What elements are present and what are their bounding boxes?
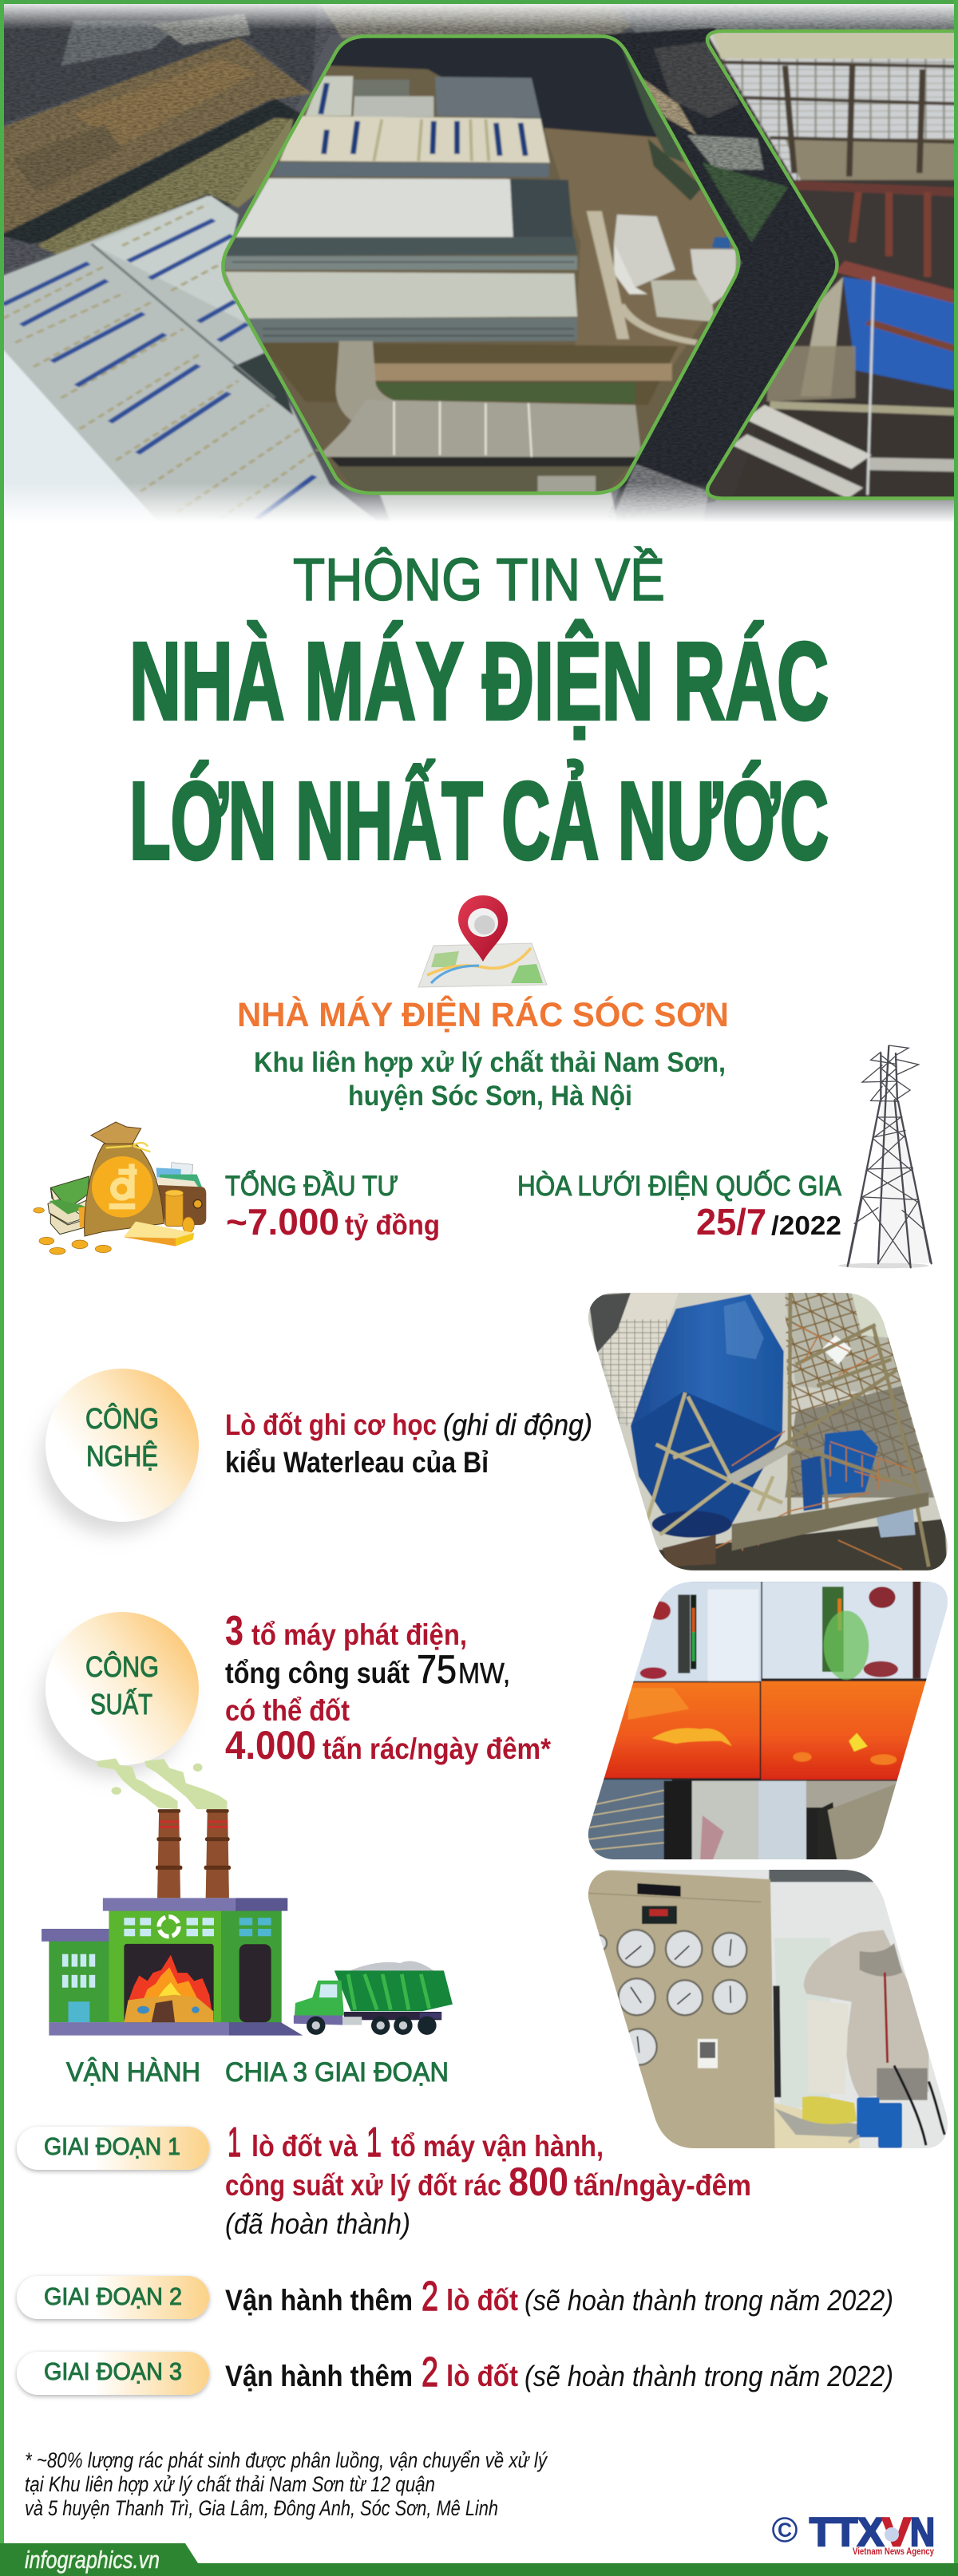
aerial photo background <box>0 0 958 543</box>
footnote: và 5 huyện Thanh Trì, Gia Lâm, Đông Anh, Sóc Sơn, Mê Linh <box>25 2496 498 2520</box>
technology description: kiểu Waterleau của Bỉ <box>225 1446 489 1479</box>
logo: TTXVN: C <box>778 2519 792 2542</box>
grid connection date <box>517 1170 842 1243</box>
pill: giai đoạn 1 <box>17 2127 209 2170</box>
stage 3 description <box>225 2349 893 2396</box>
footer bar: infographics.vn <box>25 2546 160 2574</box>
plant name and address: NHÀ MÁY ĐIỆN RÁC SÓC SƠN <box>237 995 729 1034</box>
technology description: Lò đốt ghi cơ học <box>225 1409 437 1441</box>
badge: công nghệ <box>41 1369 199 1534</box>
footnote: * ~80% lượng rác phát sinh được phân luồng, vận chuyển về xử lý <box>25 2448 548 2472</box>
pill: giai đoạn 3 <box>17 2352 209 2395</box>
stage 1 description: 1 <box>228 2120 241 2166</box>
capacity description: 75 <box>417 1647 457 1692</box>
header photo collage <box>0 0 958 543</box>
panel: capacity <box>41 1608 552 1776</box>
operation heading: VẬN HÀNH <box>66 2057 200 2088</box>
badge: công nghệ: CÔNG <box>85 1402 159 1435</box>
title: THÔNG TIN VỀ <box>293 546 665 613</box>
photo: monitor screens <box>583 1576 958 1869</box>
garbage truck <box>294 1961 453 2035</box>
right hexagon photo <box>696 28 958 502</box>
stage 1 description: 800 <box>509 2159 568 2204</box>
stage 3 description: Vận hành thêm <box>225 2360 413 2392</box>
grid connection date: 25/7 <box>696 1201 766 1243</box>
plant name and address: huyện Sóc Sơn, Hà Nội <box>348 1081 632 1112</box>
title <box>129 546 829 883</box>
smoke <box>97 1758 228 1809</box>
capacity description: tấn rác/ngày đêm* <box>323 1732 552 1765</box>
total investment <box>225 1170 440 1243</box>
pill: giai đoạn 1: GIAI ĐOẠN 1 <box>44 2132 180 2160</box>
pill: giai đoạn 2 <box>17 2276 209 2319</box>
stage 3 description: (sẽ hoàn thành trong năm 2022) <box>525 2360 893 2392</box>
footnote <box>25 2448 548 2520</box>
operation heading <box>66 2057 449 2088</box>
stage 1 description <box>225 2120 751 2240</box>
technology description <box>225 1409 592 1479</box>
illustration: waste incinerator factory <box>42 1758 453 2036</box>
panel: technology <box>41 1369 592 1534</box>
badge: công suất: CÔNG <box>85 1650 159 1683</box>
stage 2 description <box>225 2274 893 2320</box>
logo: TTXVN: N <box>910 2510 935 2554</box>
stage 1 description: tấn/ngày-đêm <box>574 2169 751 2202</box>
badge: công nghệ: NGHỆ <box>86 1440 158 1472</box>
capacity description: tổ máy phát điện, <box>251 1618 467 1651</box>
fire door <box>124 1944 214 2022</box>
total investment: TỔNG ĐẦU TƯ <box>225 1170 398 1202</box>
photo: blue boiler tower <box>583 1285 958 1580</box>
stage 2 description: Vận hành thêm <box>225 2284 413 2317</box>
pill: giai đoạn 3: GIAI ĐOẠN 3 <box>44 2357 182 2385</box>
capacity description: 4.000 <box>225 1723 316 1768</box>
logo: TTXVN: V <box>882 2510 912 2554</box>
building <box>42 1898 303 2036</box>
logo: TTXVN: Vietnam News Agency <box>853 2547 935 2557</box>
chimneys <box>156 1809 231 1898</box>
stage 3 description: 2 <box>422 2349 438 2396</box>
total investment: ~7.000 <box>226 1201 339 1243</box>
stage 2 description: 2 <box>422 2274 438 2320</box>
stage 2 <box>17 2274 893 2320</box>
logo: TTXVN <box>773 2510 935 2557</box>
hexagon green outlines <box>223 31 958 499</box>
technology description: (ghi di động) <box>443 1409 592 1441</box>
stage 1 <box>17 2120 751 2240</box>
capacity description: 3 <box>225 1608 243 1654</box>
centre hexagon photo <box>208 33 751 496</box>
stage 2 description: lò đốt <box>446 2284 518 2317</box>
stage 1 description: (đã hoàn thành) <box>225 2207 410 2240</box>
stage 3 description: lò đốt <box>446 2360 518 2392</box>
plant name and address: Khu liên hợp xử lý chất thải Nam Sơn, <box>254 1047 726 1078</box>
operation heading: CHIA 3 GIAI ĐOẠN <box>225 2057 449 2088</box>
grid connection date: /2022 <box>771 1211 841 1240</box>
footer bar <box>0 2543 958 2576</box>
stage 1 description: công suất xử lý đốt rác <box>225 2169 501 2202</box>
stage 1 description: lò đốt và <box>251 2130 358 2163</box>
badge: công suất: SUẤT <box>90 1688 152 1721</box>
capacity description: MW, <box>458 1657 510 1689</box>
photo: control cabinet and pipe <box>583 1863 958 2156</box>
total investment: tỷ đồng <box>345 1210 440 1241</box>
stage 2 description: (sẽ hoàn thành trong năm 2022) <box>525 2284 893 2317</box>
capacity description: tổng công suất <box>225 1657 410 1689</box>
pill: giai đoạn 2: GIAI ĐOẠN 2 <box>44 2282 182 2310</box>
icon: power pylon <box>838 1045 932 1268</box>
icon: map with location pin <box>418 895 547 987</box>
footnote: tại Khu liên hợp xử lý chất thải Nam Sơn từ 12 quận <box>25 2472 435 2496</box>
capacity description: có thể đốt <box>225 1694 350 1727</box>
stage 1 description: tổ máy vận hành, <box>391 2130 604 2163</box>
stage 1 description: 1 <box>366 2120 382 2166</box>
stage 3 <box>17 2349 893 2396</box>
plant name and address <box>237 995 729 1112</box>
capacity description <box>225 1608 552 1768</box>
badge: công suất <box>41 1612 199 1776</box>
logo: TTXVN: TTX <box>810 2510 884 2554</box>
grid connection date: HÒA LƯỚI ĐIỆN QUỐC GIA <box>517 1170 842 1202</box>
icon: money bag <box>34 1122 206 1254</box>
